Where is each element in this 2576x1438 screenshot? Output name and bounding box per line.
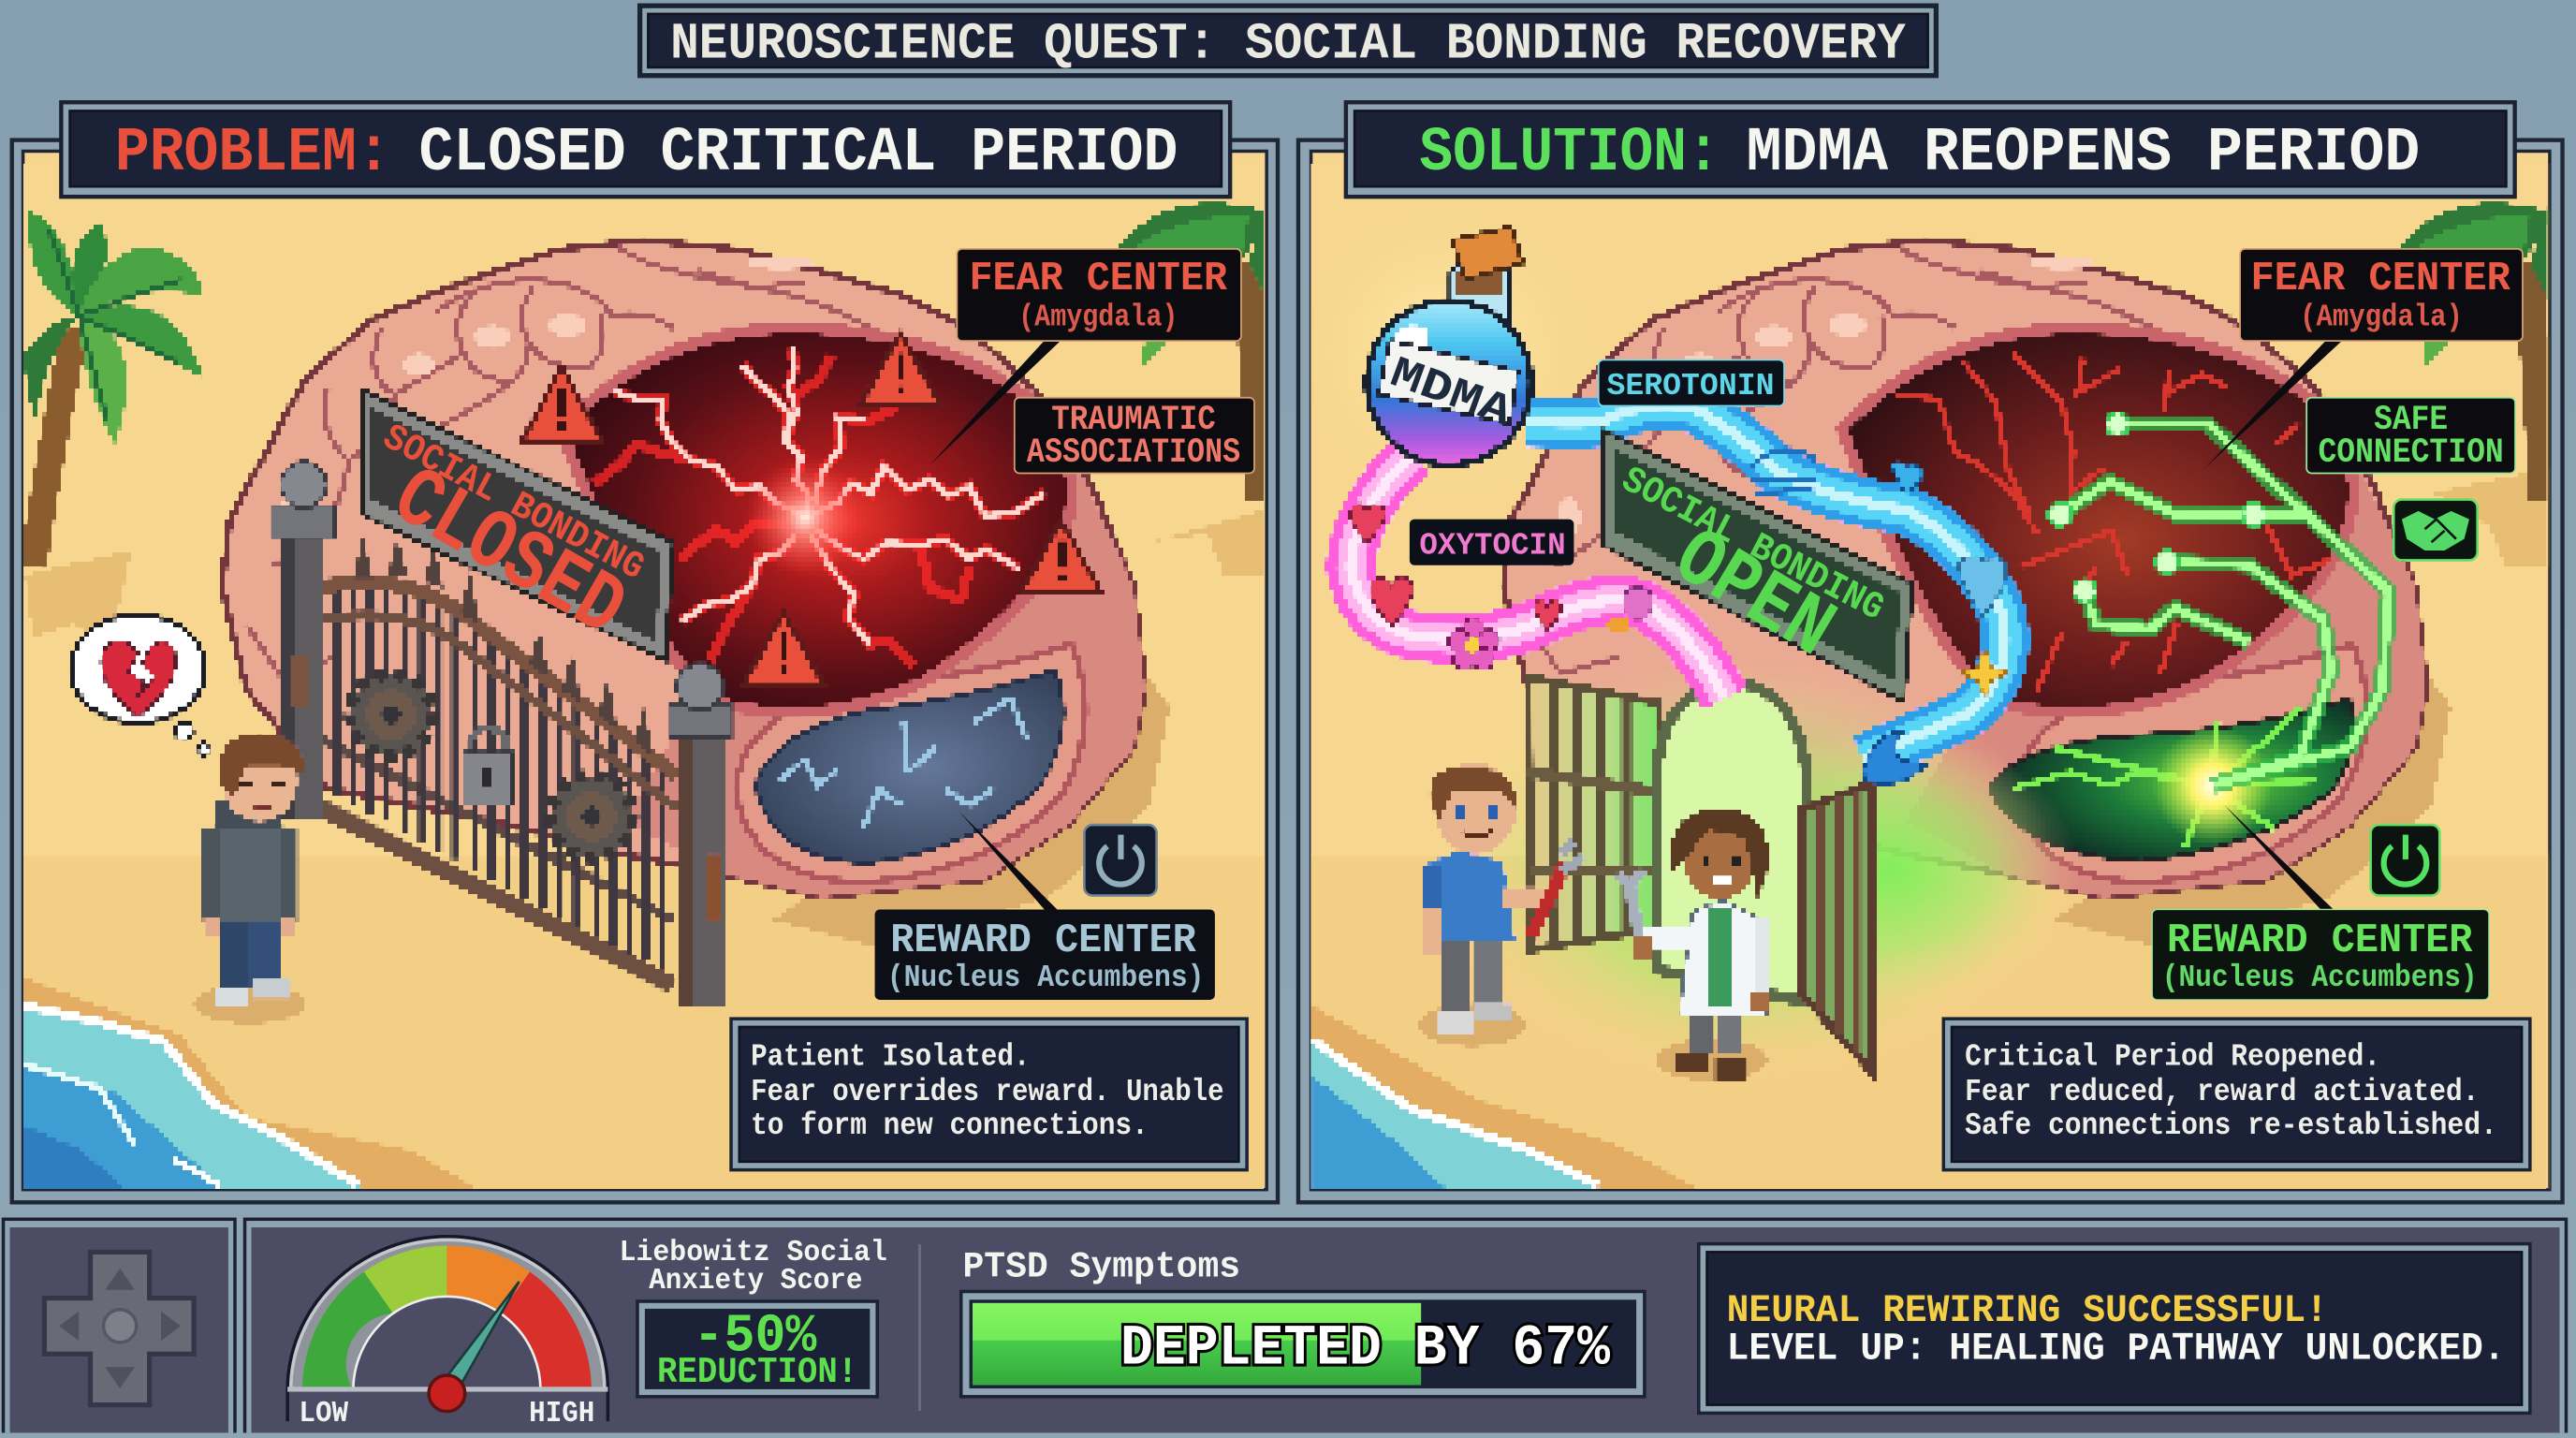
- text box: solution summary: Safe connections re-established.: [1965, 1108, 2497, 1144]
- serotonin stream: [1526, 404, 2005, 759]
- success message box: NEURAL REWIRING SUCCESSFUL!: [1727, 1288, 2328, 1333]
- header: solution: MDMA REOPENS PERIOD: [1747, 118, 2420, 189]
- gate post right: [668, 664, 731, 1005]
- arch doorway: [1656, 682, 1808, 1003]
- door right: [1801, 784, 1871, 1071]
- icon: d-pad: [44, 1252, 194, 1405]
- icon: handshake: [2393, 500, 2478, 560]
- reward center label: [875, 909, 1215, 1000]
- amygdala cavity: [567, 333, 1067, 707]
- d-pad panel: [2, 1218, 237, 1432]
- traumatic associations label: [1015, 398, 1254, 473]
- safe connection label: CONNECTION: [2318, 433, 2504, 473]
- header: solution: [1344, 100, 2517, 198]
- pointer: reward center: [959, 812, 1060, 912]
- panel frame: problem: [10, 138, 1280, 1204]
- potion bottle: [1367, 227, 1531, 465]
- traumatic associations label: ASSOCIATIONS: [1027, 433, 1240, 473]
- sign text open: SOCIAL BONDING: [1615, 459, 1891, 631]
- padlock: [463, 728, 513, 805]
- gauge low label: LOW: [299, 1398, 348, 1431]
- fear center label: (Amygdala): [1018, 301, 1178, 336]
- panel: problem: [10, 100, 1290, 1204]
- shoreline and water: [24, 977, 476, 1188]
- rusted gate: [271, 462, 731, 1005]
- safe connection label: [2306, 398, 2515, 473]
- warning icon 3: [1022, 521, 1101, 592]
- brain: [1503, 240, 2426, 897]
- text box: problem summary: Fear overrides reward. Unable: [751, 1075, 1224, 1110]
- door left: [1528, 677, 1660, 949]
- fear center label: FEAR CENTER: [970, 256, 1228, 302]
- header: problem: [59, 100, 1232, 198]
- reward center label: REWARD CENTER: [2167, 917, 2473, 964]
- header: problem: PROBLEM:: [115, 118, 391, 189]
- fear center label: FEAR CENTER: [2250, 256, 2510, 302]
- oxytocin stream: [1351, 455, 1725, 698]
- title banner: NEUROSCIENCE QUEST: SOCIAL BONDING RECOVERY: [670, 16, 1906, 73]
- text box: solution summary: Fear reduced, reward activated.: [1965, 1075, 2479, 1110]
- solution labels: [1344, 100, 2532, 1171]
- thought bubble: [70, 614, 211, 756]
- sign text closed: CLOSED: [376, 450, 640, 658]
- reward center label: (Nucleus Accumbens): [2162, 961, 2478, 996]
- pointer: fear center: [2204, 340, 2343, 468]
- gate post left: [271, 462, 333, 818]
- amygdala cavity: [1848, 333, 2349, 707]
- header: problem: CLOSED CRITICAL PERIOD: [419, 118, 1178, 189]
- text box: problem summary: Patient Isolated.: [751, 1039, 1030, 1075]
- gauge: [287, 1237, 607, 1431]
- anxiety score heading: Liebowitz Social: [620, 1237, 887, 1269]
- text box: solution summary: [1942, 1017, 2532, 1171]
- green circuit paths: [2049, 413, 2389, 785]
- warning icon 1: [522, 366, 601, 440]
- pointer: reward center: [2224, 805, 2336, 912]
- text box: problem summary: to form new connections.: [751, 1108, 1149, 1144]
- panel frame: solution: [1296, 138, 2565, 1204]
- fear center label: [957, 249, 1241, 341]
- reward center active: [1989, 698, 2355, 861]
- anxiety score heading: Anxiety Score: [649, 1265, 862, 1298]
- light rays: [1701, 731, 2078, 1010]
- bottle glow: [1295, 202, 1597, 505]
- PTSD progress bar: [959, 1290, 1647, 1399]
- shadows on sand: [24, 509, 1265, 640]
- residual red veins: [1897, 353, 2333, 690]
- status panel: [243, 1218, 2568, 1432]
- reward center label: (Nucleus Accumbens): [887, 961, 1204, 996]
- reward center label: [2152, 909, 2489, 1000]
- sign text open: OPEN: [1658, 512, 1849, 678]
- icon: broken heart: [102, 641, 176, 716]
- sign plate closed: [361, 389, 674, 661]
- patient with wrench: [1418, 762, 1584, 1047]
- icon: power on: [2371, 825, 2439, 896]
- sad patient: [194, 733, 305, 1023]
- beach scene: problem: [24, 165, 1290, 1188]
- text box: problem summary: [729, 1017, 1249, 1171]
- gauge high label: HIGH: [529, 1398, 594, 1431]
- fear center label: (Amygdala): [2300, 301, 2463, 336]
- anxiety reduction box: -50%: [694, 1307, 817, 1368]
- brain sand shadow: [772, 657, 1170, 949]
- traumatic associations label: TRAUMATIC: [1051, 401, 1216, 440]
- anxiety score heading: [620, 1237, 887, 1298]
- reward center dim: [755, 670, 1063, 862]
- bottom HUD: [2, 1218, 2568, 1432]
- fear center label: [2240, 249, 2523, 341]
- reward center label: REWARD CENTER: [890, 917, 1196, 964]
- pointer: fear center: [929, 340, 1061, 465]
- serotonin label: SEROTONIN: [1606, 369, 1775, 404]
- sign plate open: [1603, 431, 1912, 701]
- panel: solution: [1295, 100, 2571, 1204]
- shoreline and water: [1312, 1005, 1699, 1188]
- PTSD progress bar: DEPLETED BY 67%: [1120, 1317, 1610, 1382]
- oxytocin label: OXYTOCIN: [1419, 528, 1566, 564]
- palm tree left: [24, 211, 204, 567]
- beach scene: solution: [1295, 165, 2571, 1188]
- doctor with wrench: [1617, 809, 1769, 1081]
- potion label text: MDMA: [1383, 349, 1518, 439]
- brain sand shadow: [2054, 657, 2452, 949]
- gate gears: [350, 674, 633, 858]
- success message box: LEVEL UP: HEALING PATHWAY UNLOCKED.: [1727, 1326, 2506, 1371]
- green glow: [1429, 657, 2054, 1084]
- safe connection label: SAFE: [2374, 401, 2448, 440]
- sign text closed: SOCIAL BONDING: [375, 417, 651, 590]
- palm tree right: [2378, 189, 2571, 501]
- palm tree right: [1119, 201, 1264, 501]
- red lightning: [594, 348, 1045, 668]
- problem labels: [59, 100, 1254, 1171]
- success message box: [1697, 1242, 2532, 1415]
- brain: [222, 240, 1145, 897]
- warning icon 2: [861, 333, 940, 404]
- hearts and flower: [1350, 505, 1653, 669]
- anxiety reduction box: [636, 1299, 879, 1399]
- text box: solution summary: Critical Period Reopened.: [1965, 1039, 2380, 1075]
- warning icon 4: [744, 613, 823, 683]
- PTSD heading: PTSD Symptoms: [962, 1247, 1240, 1288]
- header: solution: SOLUTION:: [1419, 118, 1720, 189]
- icon: power off: [1084, 825, 1157, 896]
- warning triangles: [522, 333, 1101, 683]
- water icons: [1749, 449, 2012, 784]
- anxiety reduction box: REDUCTION!: [657, 1352, 857, 1393]
